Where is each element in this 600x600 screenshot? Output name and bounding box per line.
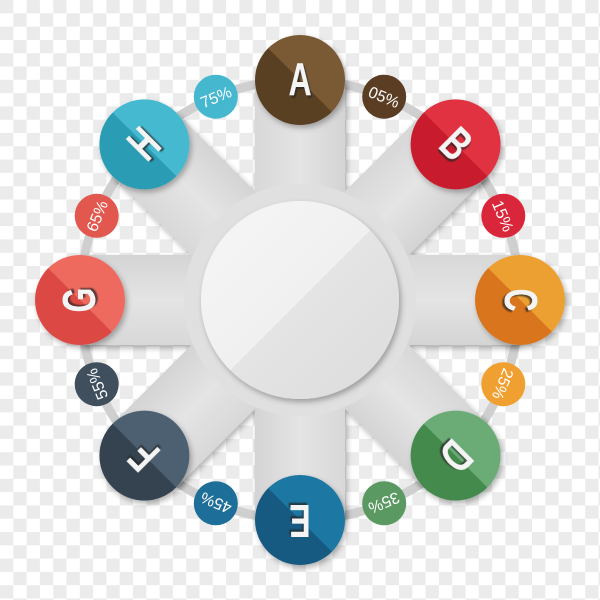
circle A: A bbox=[288, 54, 312, 105]
badge 35% bbox=[362, 481, 406, 525]
badge 05% bbox=[362, 75, 406, 119]
badge 55%: 55% bbox=[84, 366, 112, 402]
badge 65% bbox=[75, 194, 119, 238]
center circle bbox=[201, 201, 399, 399]
badge 15% bbox=[481, 194, 525, 238]
circle E: E bbox=[289, 495, 311, 546]
badge 45%: 45% bbox=[198, 488, 234, 516]
badge 55% bbox=[75, 362, 119, 406]
circle D: D bbox=[429, 429, 482, 482]
circle C: C bbox=[495, 288, 546, 312]
circle H bbox=[99, 99, 189, 189]
circle B bbox=[411, 99, 501, 189]
circle A bbox=[255, 35, 345, 125]
circle G bbox=[35, 255, 125, 345]
badge 65%: 65% bbox=[84, 198, 112, 234]
circle H: H bbox=[118, 118, 171, 171]
circle B: B bbox=[429, 118, 482, 171]
badge 75%: 75% bbox=[198, 84, 234, 112]
badge 45% bbox=[194, 481, 238, 525]
badge 25% bbox=[481, 362, 525, 406]
circle F: F bbox=[119, 431, 169, 481]
badge 05%: 05% bbox=[366, 84, 402, 112]
circle E bbox=[255, 475, 345, 565]
badge 35%: 35% bbox=[366, 488, 402, 516]
badge 25%: 25% bbox=[488, 366, 516, 402]
circle C bbox=[475, 255, 565, 345]
circle G: G bbox=[54, 288, 105, 312]
badge 75% bbox=[194, 75, 238, 119]
star arms bbox=[82, 82, 518, 518]
ring bbox=[80, 80, 520, 520]
circle F bbox=[99, 411, 189, 501]
badge 15%: 15% bbox=[488, 198, 516, 234]
circle D bbox=[411, 411, 501, 501]
